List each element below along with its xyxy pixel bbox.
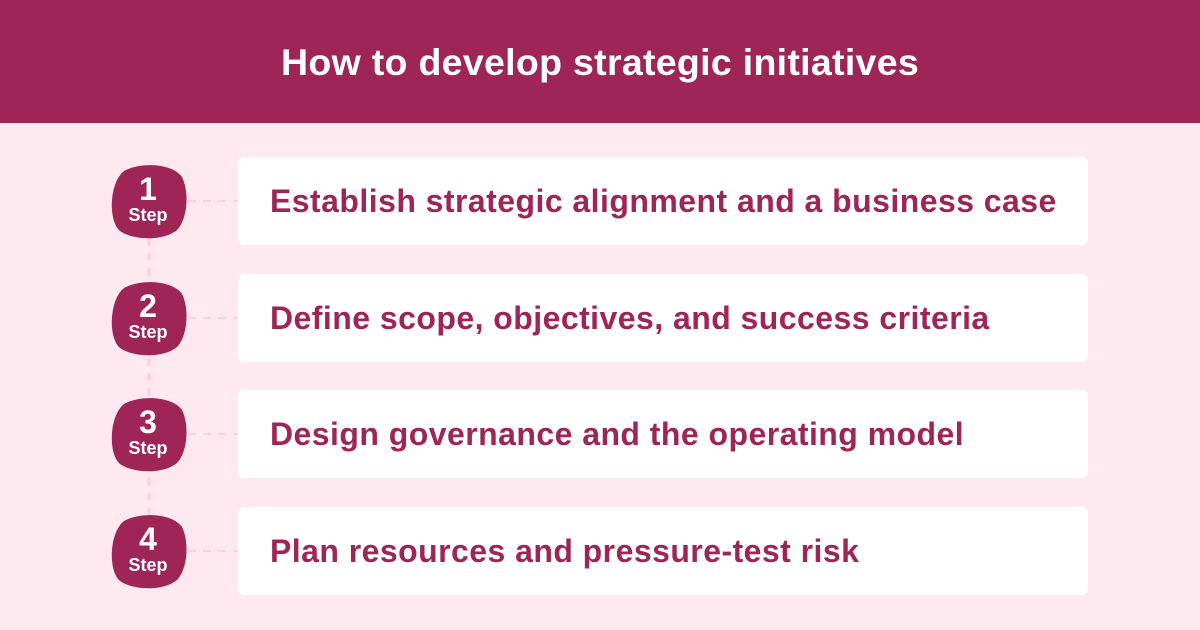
step 2 card	[238, 274, 1088, 362]
step 2 badge: Step	[128, 322, 168, 342]
step 3 badge: Step	[128, 438, 168, 458]
step 3 card	[238, 390, 1088, 478]
step 3 badge	[112, 398, 186, 472]
step 1 card: Establish strategic alignment and a business case	[270, 183, 1057, 219]
step 3 card: Design governance and the operating model	[270, 416, 964, 452]
step 4 badge	[112, 515, 186, 588]
step 2 badge: 2	[139, 288, 157, 324]
step 4 badge: 4	[139, 521, 157, 557]
step 1 badge	[112, 165, 186, 238]
step 1 card	[238, 157, 1088, 245]
step 4 card	[238, 507, 1088, 595]
step 4 card: Plan resources and pressure-test risk	[270, 533, 859, 569]
step 3 badge: 3	[139, 404, 157, 440]
step 1 badge: 1	[139, 171, 157, 207]
step 2 card: Define scope, objectives, and success criteria	[270, 300, 990, 336]
title	[0, 0, 1200, 123]
step 4 badge: Step	[128, 555, 168, 575]
step 1 badge: Step	[128, 205, 168, 225]
step 2 badge	[112, 282, 186, 356]
title: How to develop strategic initiatives	[281, 41, 919, 83]
